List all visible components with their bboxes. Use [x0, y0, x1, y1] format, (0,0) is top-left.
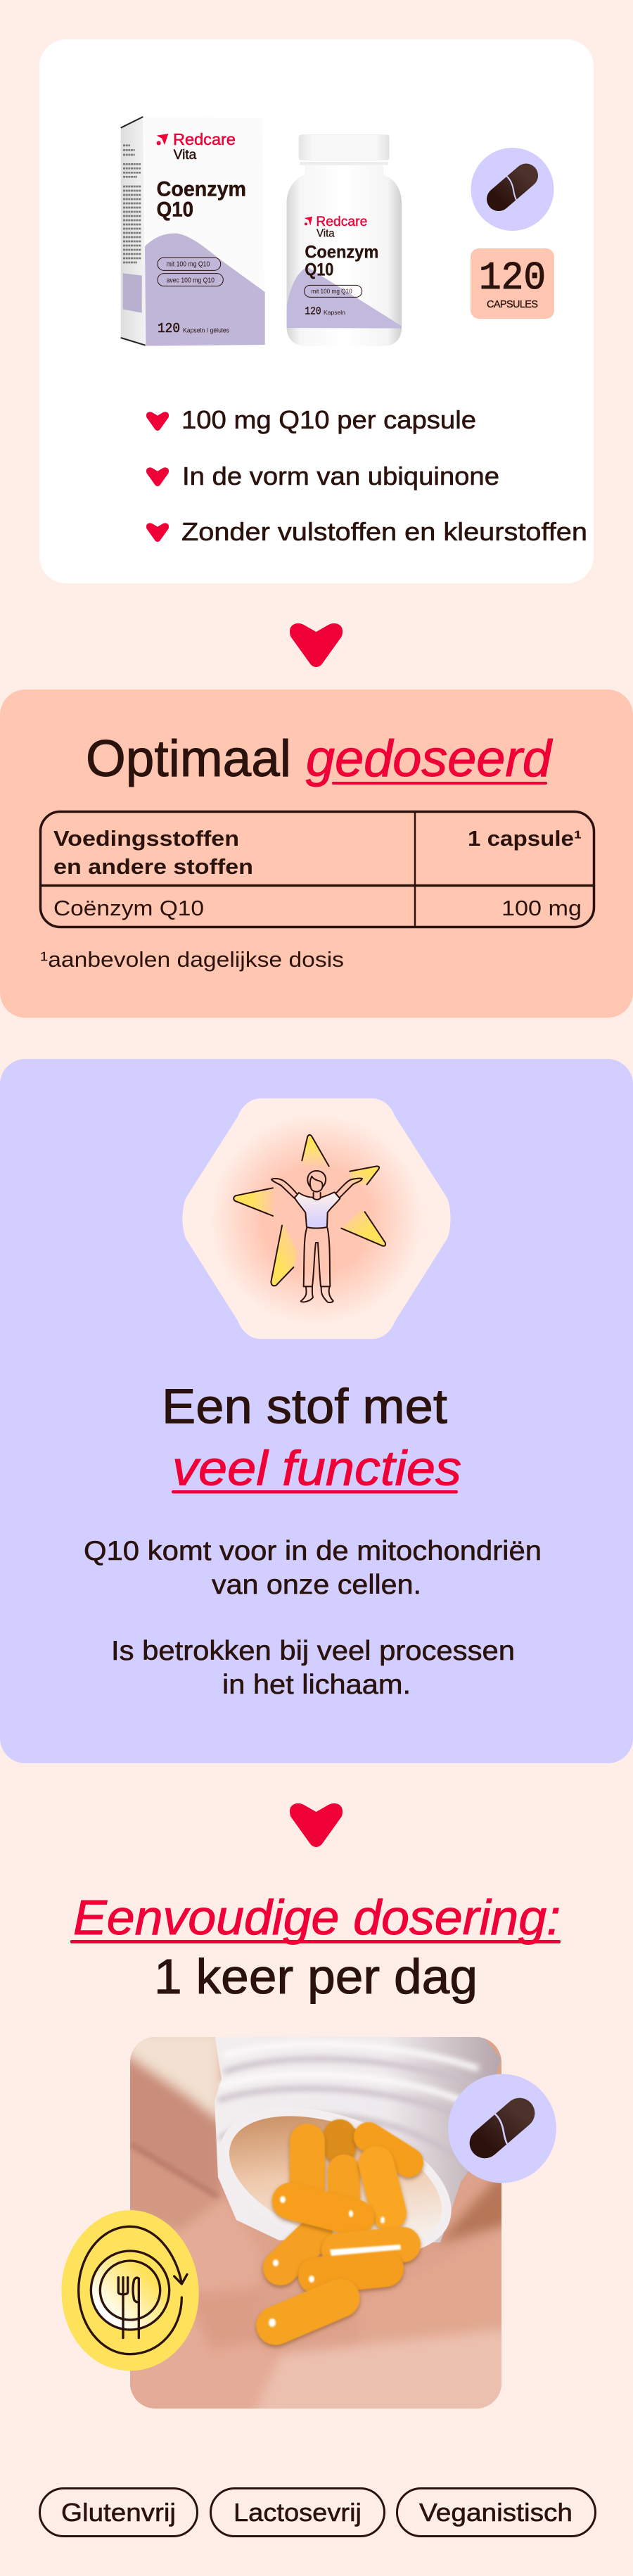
body text: van onze cellen.	[212, 1570, 421, 1600]
nutrition table: Coënzym Q10	[53, 896, 204, 920]
product box: Coenzym	[157, 177, 246, 201]
heading: een stof met veel functies: Een stof met	[162, 1379, 447, 1434]
product box	[121, 117, 265, 346]
product box: avec 100 mg Q10	[167, 277, 215, 284]
product bottle: Q10	[305, 261, 333, 280]
product bottle: 120	[305, 305, 321, 317]
product box: Kapseln / gélules	[183, 327, 229, 334]
tag: glutenvrij: Glutenvrij	[61, 2498, 176, 2527]
person with stars	[234, 1135, 385, 1302]
heading: eenvoudige dosering	[70, 1890, 561, 2004]
heading: optimaal gedoseerd: Optimaal	[86, 730, 291, 787]
bottle	[215, 2037, 501, 2249]
tag: glutenvrij	[39, 2488, 197, 2536]
product bottle: Coenzym	[305, 243, 378, 262]
heading: eenvoudige dosering: 1 keer per dag	[154, 1949, 478, 2004]
body text: Is betrokken bij veel processen	[111, 1636, 515, 1666]
panel: dosage	[0, 690, 633, 1017]
product box: Redcare	[173, 130, 236, 148]
nutrition table	[41, 812, 594, 927]
tag: veganistisch: Veganistisch	[419, 2498, 573, 2527]
heading: eenvoudige dosering: Eenvoudige dosering:	[73, 1890, 561, 1945]
product bottle: Redcare	[316, 215, 367, 229]
tag: lactosevrij: Lactosevrij	[234, 2498, 362, 2527]
tag: veganistisch	[397, 2488, 595, 2536]
badge: 120 capsules: CAPSULES	[487, 299, 538, 310]
product box: 120	[158, 321, 180, 336]
badge: 120 capsules	[471, 248, 554, 319]
heading: optimaal gedoseerd: gedoseerd	[306, 730, 553, 787]
tag: lactosevrij	[211, 2488, 384, 2536]
product box: Q10	[157, 198, 193, 221]
bullet: ubiquinone: In de vorm van ubiquinone	[182, 462, 499, 490]
heading: een stof met veel functies	[162, 1379, 461, 1496]
icon: plate with cycle arrow	[61, 2210, 199, 2371]
nutrition table: en andere stoffen	[53, 854, 253, 879]
bullet: vulstoffen: Zonder vulstoffen en kleurstoffen	[181, 517, 587, 546]
photo: capsules pouring from bottle onto hand	[123, 2030, 510, 2417]
arrow: heart down 1	[290, 623, 343, 667]
product bottle: Vita	[316, 228, 335, 240]
icon: capsule badge on photo	[448, 2074, 556, 2183]
product bottle: Kapseln	[324, 309, 345, 316]
heading: optimaal gedoseerd	[86, 730, 553, 787]
product box: Vita	[174, 148, 197, 163]
capsules	[276, 2136, 409, 2326]
heading: een stof met veel functies: veel functies	[172, 1441, 461, 1496]
badge: 120 capsules: 120	[479, 255, 546, 300]
nutrition table: Voedingsstoffen	[53, 826, 239, 851]
footnote: ¹aanbevolen dagelijkse dosis	[40, 947, 344, 972]
arrow: heart down 2	[290, 1803, 343, 1847]
icon: capsule in lavender circle	[471, 148, 554, 231]
nutrition table: 1 capsule¹	[468, 826, 582, 851]
product bottle: mit 100 mg Q10	[311, 288, 352, 295]
body text	[84, 1536, 542, 1700]
bullet: 100 mg: 100 mg Q10 per capsule	[181, 405, 476, 434]
body text: in het lichaam.	[222, 1670, 411, 1700]
product box: mit 100 mg Q10	[167, 261, 210, 269]
product bottle	[287, 135, 402, 346]
panel: functions	[0, 1059, 633, 1763]
nutrition table: 100 mg	[501, 896, 582, 920]
benefit list	[146, 405, 587, 546]
hexagon illustration	[183, 1098, 450, 1339]
panel: product card	[39, 39, 594, 583]
body text: Q10 komt voor in de mitochondriën	[84, 1536, 542, 1566]
